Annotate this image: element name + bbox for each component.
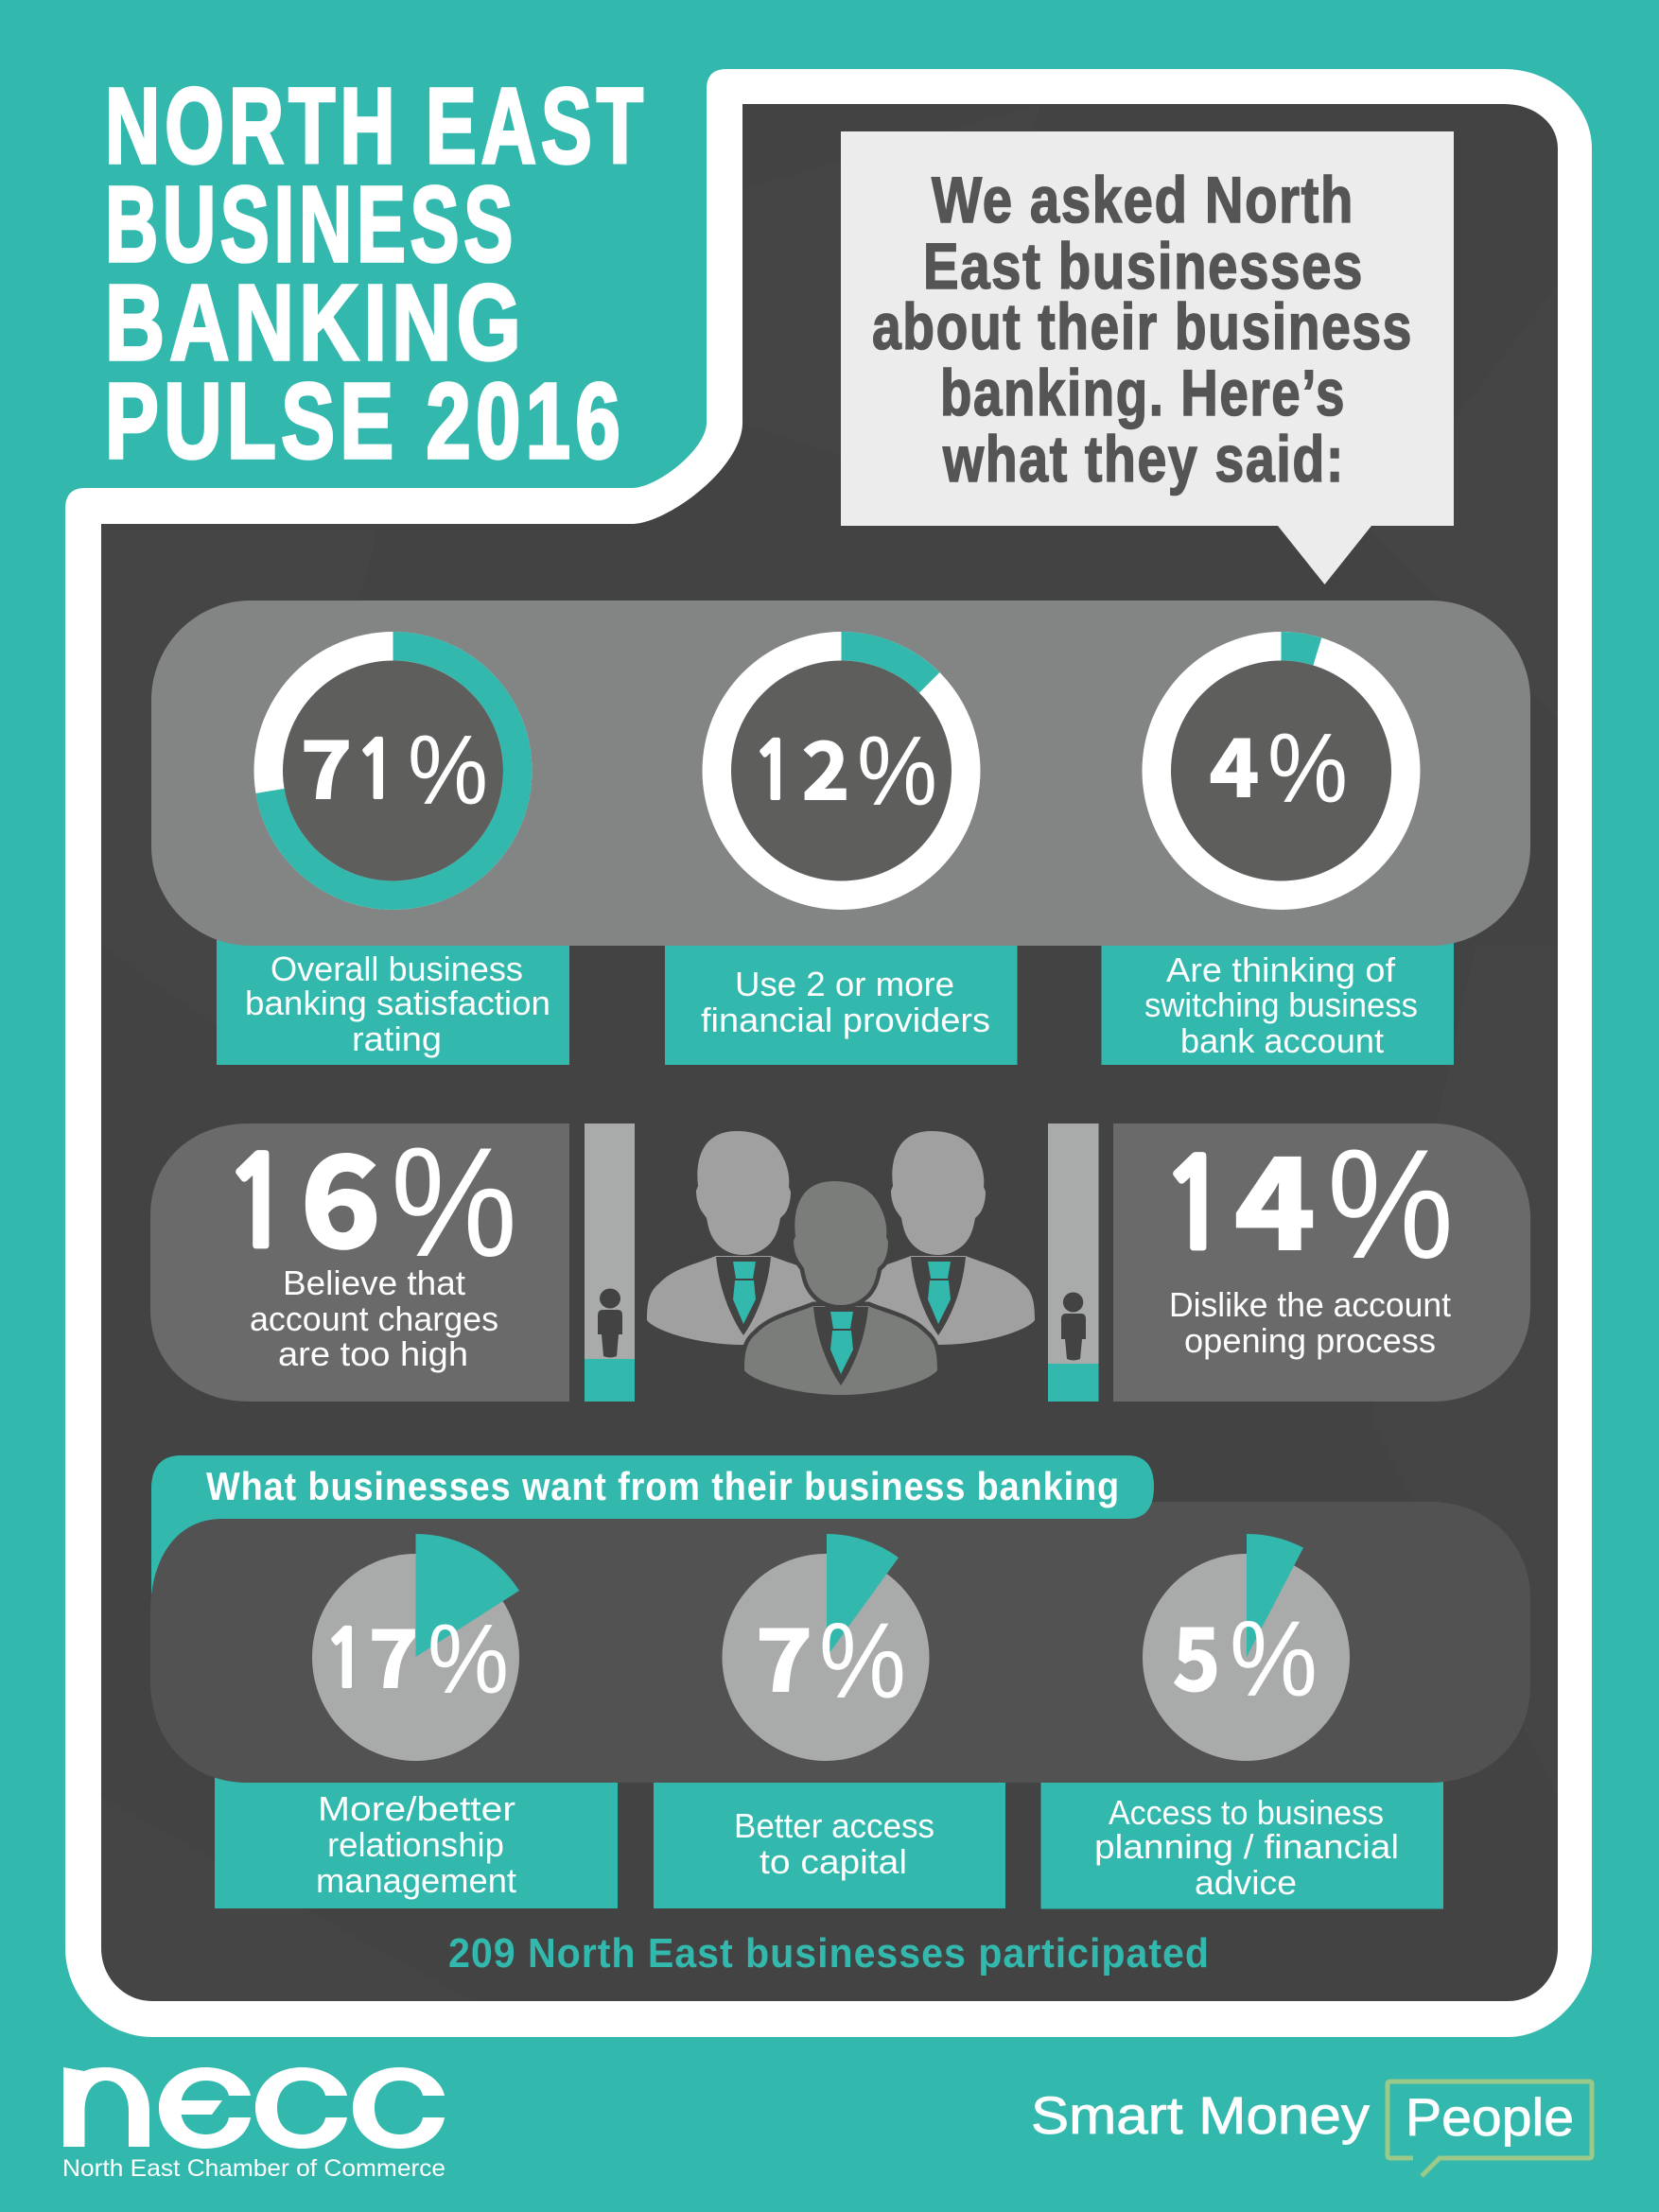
panel: 14% account opening: opening process: [1184, 1321, 1436, 1360]
icon: front business man: [744, 1181, 937, 1395]
donut 4%: [1143, 632, 1421, 910]
title: BUSINESS: [105, 165, 517, 284]
label box: planning advice: planning / financial: [1094, 1827, 1399, 1866]
speech bubble text: banking. Here’s: [940, 357, 1346, 429]
heading: what businesses want: What businesses want from their business banking: [206, 1464, 1120, 1508]
label box: capital: Better access: [734, 1806, 934, 1845]
speech bubble text: about their business: [872, 290, 1413, 363]
speech bubble text: [872, 164, 1413, 496]
icon: left business man: [647, 1131, 840, 1345]
pie 17%: 1: [323, 1620, 368, 1699]
pie 7%: %: [819, 1601, 906, 1720]
donut 12%: [702, 632, 980, 910]
donut 4%: 4: [1210, 705, 1259, 820]
logo: Smart Money People: Smart Money: [1031, 2085, 1370, 2145]
panel: 14% account opening: %: [1327, 1117, 1454, 1291]
label box: satisfaction: Overall business: [271, 949, 523, 988]
label box: satisfaction: rating: [352, 1019, 442, 1058]
title: [105, 66, 648, 480]
panel: top statistics: [151, 601, 1530, 946]
bar: 1 in 6 person: [585, 1123, 635, 1402]
label box: providers: financial providers: [701, 1001, 990, 1039]
label box: relationship management: More/better: [318, 1789, 515, 1828]
logo speech bubble outline: [1388, 2081, 1592, 2176]
label box: planning advice: Access to business: [1109, 1793, 1384, 1832]
donut 12%: 2: [802, 708, 849, 823]
participants note: 209 North East businesses participated: [448, 1930, 1210, 1977]
dark content panel: [101, 104, 1558, 2001]
label box: providers: Use 2 or more: [735, 965, 954, 1003]
title: NORTH EAST: [105, 66, 648, 185]
label box: providers: [665, 927, 1018, 1065]
title: BANKING: [105, 263, 526, 382]
label box: switching: switching business: [1144, 985, 1418, 1024]
teal header backing: [151, 1455, 303, 1608]
pie 5%: %: [1230, 1599, 1318, 1718]
speech bubble text: what they said:: [942, 423, 1345, 496]
panel: 16% account charges: %: [391, 1115, 517, 1289]
label box: capital: [654, 1768, 1005, 1908]
pie 17%: %: [428, 1605, 509, 1715]
icon: person: [598, 1288, 622, 1358]
pie 7%: 7: [756, 1592, 812, 1716]
pie 17%: 7: [369, 1596, 418, 1711]
panel: 14% account opening: Dislike the account: [1169, 1285, 1451, 1324]
heading: what businesses want: [151, 1455, 1154, 1519]
donut 12%: 1: [751, 732, 796, 811]
label box: switching: [1101, 927, 1454, 1065]
bar: 1 in 7 person: [1048, 1123, 1099, 1402]
panel: 14% account opening: 1: [1160, 1143, 1231, 1267]
logo: Smart Money People: People: [1406, 2087, 1574, 2147]
label box: switching: Are thinking of: [1166, 950, 1396, 989]
panel: 14% account opening: [1113, 1105, 1530, 1402]
label box: relationship management: management: [316, 1861, 516, 1900]
icon: business people group: [647, 1131, 1035, 1395]
pie 5%: 5: [1173, 1591, 1220, 1716]
panel: 16% account charges: account charges: [250, 1299, 498, 1338]
panel: 16% account charges: 6: [301, 1103, 380, 1283]
panel: 16% account charges: Believe that: [283, 1263, 465, 1302]
donut 71%: 1: [354, 731, 399, 810]
logo tagline: North East Chamber of Commerce: [62, 2155, 445, 2182]
pie 7%: [723, 1534, 929, 1761]
panel: 16% account charges: 1: [222, 1141, 294, 1265]
speech bubble: [841, 131, 1454, 584]
donut 71%: 7: [301, 707, 352, 822]
label box: capital: to capital: [760, 1842, 907, 1881]
label box: satisfaction: [217, 927, 569, 1065]
logo: necc: [62, 2067, 445, 2182]
speech bubble text: We asked North: [932, 164, 1354, 236]
pie 17%: [312, 1534, 519, 1761]
logo: Smart Money People: [1031, 2081, 1592, 2176]
icon: right business man: [842, 1131, 1035, 1345]
panel: 16% account charges: are too high: [278, 1334, 468, 1373]
label box: planning advice: advice: [1195, 1863, 1297, 1902]
panel: 16% account charges: [150, 1103, 569, 1402]
label box: planning advice: [1040, 1768, 1443, 1908]
donut 12%: %: [857, 717, 937, 827]
icon: person: [1061, 1292, 1086, 1360]
title: PULSE 2016: [105, 361, 625, 480]
panel: what businesses want: [150, 1502, 1530, 1783]
label box: relationship management: relationship: [327, 1825, 504, 1864]
donut 71%: %: [408, 716, 488, 826]
speech bubble text: East businesses: [923, 230, 1364, 303]
pie 5%: [1143, 1534, 1350, 1761]
label box: satisfaction: banking satisfaction: [245, 984, 550, 1022]
label box: switching: bank account: [1180, 1021, 1384, 1060]
label box: relationship management: [215, 1768, 618, 1908]
donut 71%: [253, 632, 532, 910]
panel: 14% account opening: 4: [1235, 1105, 1315, 1285]
donut 4%: %: [1267, 714, 1348, 824]
